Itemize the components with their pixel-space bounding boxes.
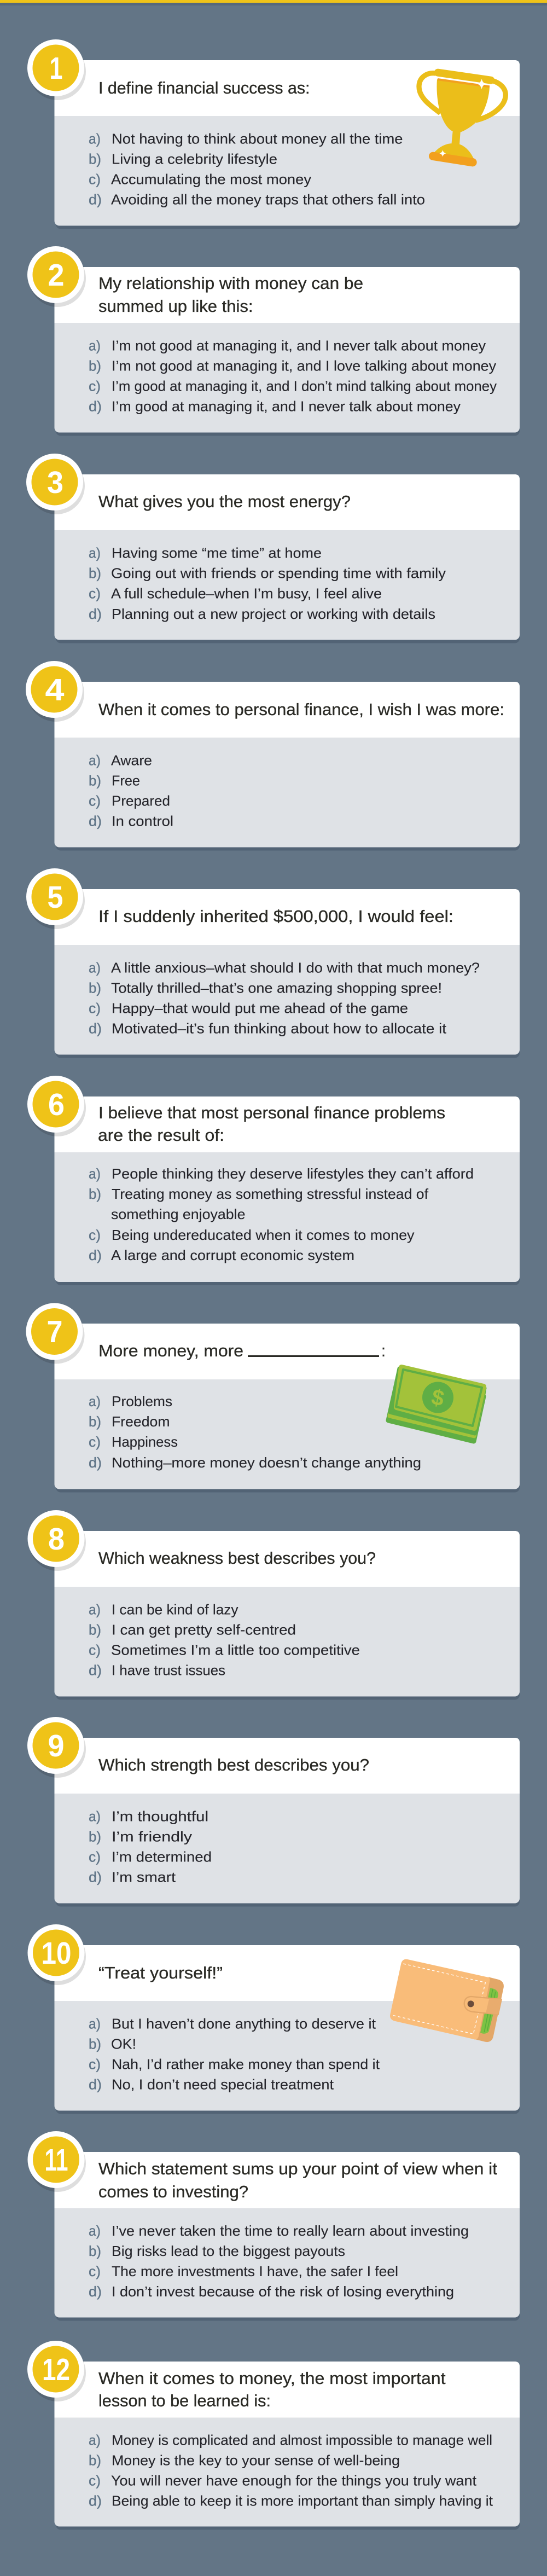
- answer options: b): [89, 979, 101, 996]
- answer options: d): [89, 2493, 102, 2509]
- number badge 12: [27, 2341, 86, 2401]
- answer options: [89, 1601, 360, 1679]
- question text: What gives you the most energy?: [98, 492, 351, 511]
- question text: When it comes to personal finance, I wish I was more:: [98, 700, 504, 719]
- answer options: Treating money as something stressful instead of: [112, 1186, 429, 1202]
- answer options: b): [89, 1622, 101, 1638]
- number badge 7: 7: [47, 1314, 62, 1349]
- answer options: [89, 2432, 493, 2509]
- icon: trophy: [419, 73, 505, 163]
- number badge 7: [26, 1303, 84, 1364]
- answer options: Going out with friends or spending time with family: [111, 565, 446, 581]
- answer options: Planning out a new project or working with details: [112, 606, 435, 622]
- card body: [55, 1096, 520, 1285]
- answer options: Money is the key to your sense of well-being: [112, 2452, 400, 2469]
- question text: I define financial success as:: [98, 78, 310, 97]
- number badge 9: [27, 1717, 86, 1778]
- answer options: Being undereducated when it comes to money: [112, 1227, 415, 1243]
- card body: [55, 267, 520, 436]
- answer options: c): [89, 2472, 101, 2488]
- answer options: [89, 1808, 212, 1885]
- card body: [55, 889, 520, 1058]
- answer options: a): [89, 1808, 101, 1824]
- answer options: a): [89, 2016, 101, 2032]
- answer options: a): [89, 752, 101, 768]
- answer options: Accumulating the most money: [111, 171, 311, 187]
- answer options: People thinking they deserve lifestyles they can’t afford: [112, 1165, 474, 1182]
- icon: stack of money: [388, 1367, 485, 1441]
- question text: comes to investing?: [98, 2182, 248, 2201]
- question text: “Treat yourself!”: [98, 1963, 223, 1982]
- answer options: c): [89, 585, 101, 602]
- answer options: Motivated–it’s fun thinking about how to allocate it: [112, 1020, 447, 1036]
- answer options: Sometimes I’m a little too competitive: [111, 1641, 360, 1658]
- answer options: Prepared: [112, 792, 170, 809]
- answer options: c): [89, 171, 101, 187]
- answer options: Happiness: [112, 1434, 178, 1450]
- card body: [55, 1531, 520, 1699]
- answer options: I’m friendly: [112, 1829, 192, 1845]
- answer options: A large and corrupt economic system: [111, 1247, 354, 1263]
- answer options: b): [89, 2243, 101, 2259]
- number badge 11: [27, 2131, 86, 2192]
- number badge 3: 3: [47, 465, 63, 500]
- answer options: I don’t invest because of the risk of losing everything: [112, 2283, 454, 2300]
- answer options: Avoiding all the money traps that others fall into: [111, 192, 425, 208]
- answer options: [89, 960, 480, 1036]
- answer options: c): [89, 378, 101, 394]
- panel: question 8: [27, 1510, 520, 1699]
- number badge 5: 5: [47, 880, 63, 915]
- question text: When it comes to money, the most important: [98, 2369, 446, 2388]
- answer options: [89, 1393, 421, 1471]
- answer options: c): [89, 792, 101, 809]
- answer options: b): [89, 565, 101, 581]
- answer options: d): [89, 2076, 102, 2092]
- answer options: d): [89, 1247, 102, 1263]
- answer options: d): [89, 1020, 102, 1036]
- panel: question 3: [26, 454, 520, 643]
- question text: My relationship with money can be: [98, 274, 363, 293]
- number badge 4: [26, 661, 84, 722]
- answer options: I’m not good at managing it, and I never talk about money: [112, 337, 486, 353]
- answer options: Living a celebrity lifestyle: [112, 151, 277, 167]
- answer options: b): [89, 2035, 101, 2052]
- answer options: c): [89, 1227, 101, 1243]
- question text: More money, more: [98, 1341, 243, 1360]
- answer options: b): [89, 2452, 101, 2469]
- question text: :: [381, 1341, 386, 1360]
- card body: [55, 1324, 520, 1493]
- answer options: Freedom: [112, 1413, 170, 1430]
- answer options: b): [89, 1413, 101, 1430]
- question text: [98, 1103, 445, 1145]
- answer options: A full schedule–when I’m busy, I feel alive: [111, 585, 382, 602]
- answer options: OK!: [111, 2035, 136, 2052]
- number badge 8: [27, 1510, 86, 1571]
- number badge 1: [27, 39, 86, 100]
- question text: are the result of:: [98, 1125, 224, 1145]
- answer options: [89, 2223, 469, 2300]
- answer options: I can be kind of lazy: [112, 1601, 238, 1617]
- card body: [55, 1738, 520, 1906]
- question text: Which strength best describes you?: [98, 1755, 369, 1774]
- card body: [55, 60, 520, 229]
- answer options: something enjoyable: [111, 1206, 245, 1222]
- number badge 11: 11: [45, 2143, 68, 2178]
- number badge 12: 12: [42, 2352, 70, 2387]
- top yellow bar: [0, 0, 547, 5]
- question text: lesson to be learned is:: [98, 2391, 271, 2410]
- panel: question 10: [27, 1924, 520, 2114]
- answer options: b): [89, 1186, 101, 1202]
- panel: question 6: [27, 1076, 520, 1285]
- answer options: A little anxious–what should I do with that much money?: [111, 960, 480, 976]
- answer options: I’m not good at managing it, and I love talking about money: [112, 358, 496, 374]
- answer options: No, I don’t need special treatment: [112, 2076, 334, 2092]
- answer options: I’m determined: [112, 1848, 212, 1865]
- answer options: a): [89, 130, 101, 147]
- answer options: a): [89, 1601, 101, 1617]
- number badge 3: [26, 454, 85, 514]
- answer options: b): [89, 1829, 101, 1845]
- answer options: [89, 2016, 380, 2092]
- question text: summed up like this:: [98, 297, 253, 316]
- answer options: c): [89, 2056, 101, 2073]
- panel: question 12: [27, 2341, 520, 2530]
- answer options: Money is complicated and almost impossible to manage well: [112, 2432, 492, 2448]
- panel: question 11: [27, 2131, 520, 2321]
- answer options: Problems: [112, 1393, 172, 1409]
- card body: [55, 1945, 520, 2114]
- answer options: I’m smart: [112, 1869, 176, 1885]
- answer options: a): [89, 337, 101, 353]
- answer options: c): [89, 1434, 101, 1450]
- card body: [55, 2362, 520, 2530]
- answer options: Having some “me time” at home: [112, 545, 322, 561]
- answer options: Aware: [111, 752, 152, 768]
- question text: [98, 274, 363, 316]
- answer options: d): [89, 1662, 102, 1679]
- panel: question 4: [26, 661, 520, 850]
- number badge 5: [26, 868, 85, 929]
- question text: [98, 1341, 386, 1360]
- answer options: You will never have enough for the things you truly want: [111, 2472, 477, 2488]
- answer options: Being able to keep it is more important than simply having it: [112, 2493, 493, 2509]
- number badge 10: 10: [42, 1936, 71, 1971]
- question text: If I suddenly inherited $500,000, I would feel:: [98, 907, 453, 926]
- card body: [55, 2152, 520, 2321]
- panel: question 7: [26, 1303, 520, 1493]
- answer options: d): [89, 192, 102, 208]
- answer options: [89, 752, 173, 829]
- number badge 2: [27, 246, 86, 307]
- answer options: In control: [112, 813, 173, 829]
- panel: question 9: [27, 1717, 520, 1906]
- question text: Which statement sums up your point of view when it: [98, 2159, 497, 2178]
- answer options: The more investments I have, the safer I feel: [112, 2263, 398, 2279]
- answer options: But I haven’t done anything to deserve it: [112, 2016, 376, 2032]
- number badge 4: 4: [45, 672, 65, 707]
- answer options: [89, 1165, 474, 1263]
- answer options: Big risks lead to the biggest payouts: [112, 2243, 345, 2259]
- panel: question 5: [26, 868, 520, 1058]
- answer options: I’ve never taken the time to really learn about investing: [112, 2223, 469, 2239]
- answer options: I’m thoughtful: [112, 1808, 208, 1824]
- answer options: b): [89, 358, 101, 374]
- question text: [98, 2369, 446, 2410]
- answer options: b): [89, 773, 101, 789]
- number badge 1: 1: [49, 51, 62, 86]
- answer options: c): [89, 2263, 101, 2279]
- answer options: a): [89, 960, 101, 976]
- answer options: d): [89, 813, 102, 829]
- answer options: a): [89, 545, 101, 561]
- icon: wallet: [390, 1959, 504, 2042]
- number badge 9: 9: [48, 1728, 65, 1763]
- answer options: d): [89, 606, 102, 622]
- answer options: I can get pretty self-centred: [112, 1622, 296, 1638]
- answer options: a): [89, 1165, 101, 1182]
- answer options: b): [89, 151, 101, 167]
- answer options: Nothing–more money doesn’t change anything: [112, 1454, 421, 1471]
- answer options: Free: [112, 773, 140, 789]
- answer options: Totally thrilled–that’s one amazing shopping spree!: [111, 979, 442, 996]
- number badge 10: [27, 1924, 86, 1985]
- answer options: c): [89, 1641, 101, 1658]
- answer options: [89, 130, 425, 208]
- number badge 6: 6: [48, 1087, 65, 1122]
- answer options: a): [89, 2223, 101, 2239]
- number badge 6: [27, 1076, 86, 1136]
- answer options: d): [89, 1869, 102, 1885]
- question text: Which weakness best describes you?: [98, 1548, 376, 1568]
- answer options: Nah, I’d rather make money than spend it: [112, 2056, 380, 2073]
- answer options: I’m good at managing it, and I never talk about money: [112, 398, 461, 415]
- question text: I believe that most personal finance problems: [98, 1103, 445, 1122]
- answer options: d): [89, 2283, 102, 2300]
- answer options: c): [89, 1000, 101, 1017]
- answer options: Happy–that would put me ahead of the game: [112, 1000, 408, 1017]
- answer options: [89, 337, 497, 415]
- card body: [55, 474, 520, 643]
- number badge 8: 8: [48, 1522, 65, 1557]
- answer options: a): [89, 2432, 101, 2448]
- answer options: [89, 545, 446, 622]
- answer options: I have trust issues: [112, 1662, 225, 1679]
- answer options: Not having to think about money all the time: [112, 130, 403, 147]
- answer options: I’m good at managing it, and I don’t mind talking about money: [112, 378, 497, 394]
- answer options: d): [89, 1454, 102, 1471]
- card body: [55, 682, 520, 850]
- panel: question 1: [27, 39, 520, 229]
- answer options: a): [89, 1393, 101, 1409]
- question text: [98, 2159, 497, 2201]
- answer options: d): [89, 398, 102, 415]
- number badge 2: 2: [48, 258, 65, 293]
- panel: question 2: [27, 246, 520, 436]
- answer options: c): [89, 1848, 101, 1865]
- icon: stack of money: $: [429, 1385, 446, 1411]
